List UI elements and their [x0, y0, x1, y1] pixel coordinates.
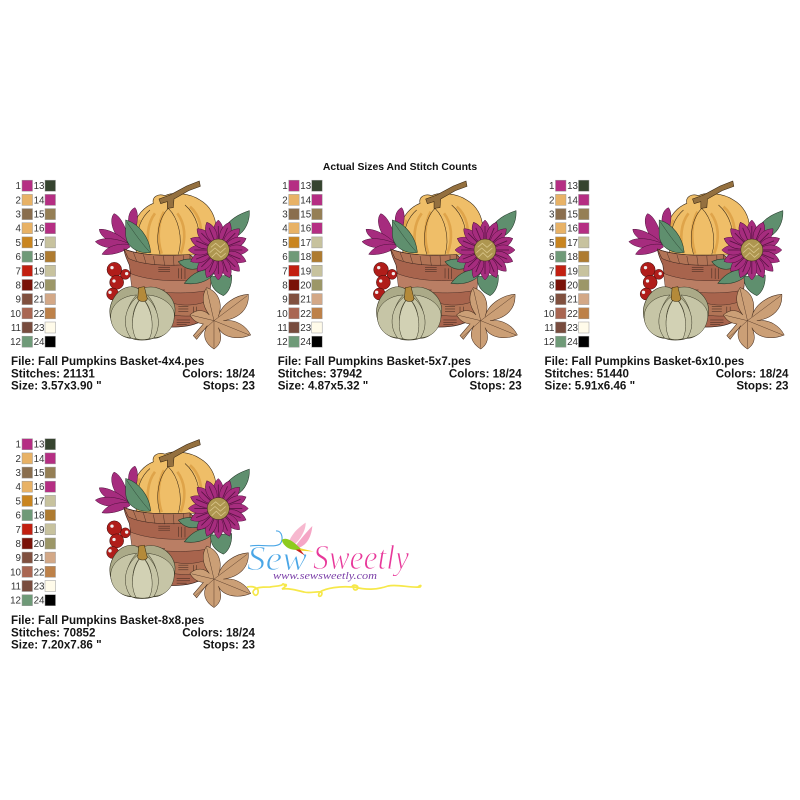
swatch numbers 4x4: 3: [16, 210, 22, 221]
swatch numbers 6x10: 22: [567, 309, 578, 320]
swatch numbers 5x7: 22: [300, 309, 311, 320]
swatch numbers 8x8: 17: [34, 496, 44, 507]
file info 6x10: [544, 355, 789, 393]
swatch numbers 5x7: 11: [278, 323, 288, 334]
file info 4x4: Stops: 23: [203, 380, 256, 393]
panel: 8x8 design: [10, 439, 256, 652]
swatch numbers 4x4: [10, 181, 45, 348]
swatch numbers 4x4: 1: [16, 181, 21, 192]
swatch numbers 5x7: 14: [300, 195, 312, 206]
swatch numbers 4x4: 5: [16, 238, 22, 249]
logo swash: [250, 531, 282, 546]
swatch numbers 5x7: 10: [277, 309, 288, 320]
swatch numbers 4x4: 10: [10, 309, 22, 320]
logo: Sew Sweetly: [247, 523, 421, 596]
swatch numbers 6x10: 23: [567, 323, 579, 334]
swatch numbers 8x8: 23: [34, 582, 45, 592]
swatch numbers 5x7: 12: [277, 337, 288, 348]
swatch numbers 6x10: 19: [567, 266, 578, 277]
swatch numbers 4x4: 22: [34, 309, 44, 320]
swatch numbers 5x7: 3: [282, 210, 288, 221]
swatch numbers 6x10: 2: [549, 195, 554, 206]
swatch numbers 8x8: 7: [16, 525, 21, 536]
file info 4x4: Colors: 18/24: [182, 367, 256, 380]
swatch numbers 6x10: 3: [549, 210, 555, 221]
swatch numbers 6x10: 21: [567, 295, 578, 306]
panel: 6x10 design: [544, 180, 789, 393]
swatch numbers 5x7: 23: [300, 323, 312, 334]
swatch numbers 8x8: 11: [11, 582, 21, 592]
swatch numbers 4x4: 19: [34, 266, 44, 277]
swatch numbers 5x7: 17: [300, 238, 311, 249]
swatch numbers 8x8: 14: [34, 454, 45, 465]
file info 6x10: Stops: 23: [736, 380, 789, 393]
file info 5x7: File: Fall Pumpkins Basket-5x7.pes: [278, 355, 471, 368]
swatch numbers 6x10: 1: [549, 181, 554, 192]
file info 5x7: Stops: 23: [470, 380, 522, 393]
swatch numbers 4x4: 2: [16, 195, 21, 206]
swatch numbers 8x8: 15: [34, 468, 45, 479]
swatch numbers 8x8: 12: [10, 596, 21, 607]
swatch numbers 8x8: 1: [16, 440, 21, 451]
file info 4x4: [11, 355, 256, 393]
swatch numbers 4x4: 18: [34, 252, 45, 263]
color swatches 4x4: [22, 180, 56, 347]
swatch numbers 8x8: 21: [34, 553, 44, 564]
swatch numbers 5x7: 5: [282, 238, 288, 249]
swatch numbers 8x8: 19: [34, 525, 44, 536]
swatch numbers 6x10: 4: [549, 224, 555, 235]
swatch numbers 4x4: 21: [34, 295, 44, 306]
swatch numbers 5x7: 19: [300, 266, 311, 277]
swatch numbers 4x4: 9: [16, 295, 21, 306]
swatch numbers 4x4: 15: [34, 210, 45, 221]
swatch numbers 4x4: 11: [11, 323, 21, 334]
swatch numbers 6x10: 12: [544, 337, 554, 348]
swatch numbers 5x7: 1: [282, 181, 288, 192]
file info 6x10: File: Fall Pumpkins Basket-6x10.pes: [544, 355, 744, 368]
file info 5x7: Colors: 18/24: [449, 367, 522, 380]
file info 4x4: Stitches: 21131: [11, 367, 95, 380]
embroidery artwork 8x8: [95, 439, 251, 607]
swatch numbers 5x7: 21: [300, 295, 311, 306]
swatch numbers 4x4: 17: [34, 238, 44, 249]
file info 8x8: [11, 614, 256, 652]
file info 6x10: Colors: 18/24: [716, 367, 789, 380]
swatch numbers 4x4: 4: [16, 224, 22, 235]
swatch numbers 6x10: 20: [567, 280, 579, 292]
embroidery artwork 4x4: [95, 181, 251, 349]
swatch numbers 5x7: 18: [300, 252, 312, 263]
swatch numbers 8x8: [10, 440, 45, 607]
swatch numbers 5x7: [277, 181, 312, 348]
panel: 4x4 design: [10, 180, 256, 393]
swatch numbers 6x10: 9: [549, 295, 554, 306]
swatch numbers 8x8: 16: [34, 482, 45, 493]
swatch numbers 4x4: 24: [34, 337, 45, 348]
swatch numbers 4x4: 12: [10, 337, 21, 348]
swatch numbers 8x8: 18: [34, 511, 45, 522]
file info 8x8: Stitches: 70852: [11, 626, 95, 639]
swatch numbers 6x10: 5: [549, 238, 555, 249]
file info 4x4: Size: 3.57x3.90 ": [11, 380, 102, 393]
swatch numbers 5x7: 2: [282, 195, 288, 206]
swatch numbers 8x8: 9: [16, 553, 21, 564]
swatch numbers 4x4: 14: [34, 195, 45, 206]
swatch numbers 8x8: 22: [34, 567, 44, 578]
swatch numbers 6x10: 6: [549, 252, 555, 263]
embroidery artwork 6x10: [629, 181, 784, 349]
swatch numbers 6x10: 13: [567, 181, 579, 192]
panel: 5x7 design: [277, 180, 522, 393]
logo url: www.sewsweetly.com: [273, 570, 377, 582]
swatch numbers 8x8: 4: [16, 482, 22, 493]
swatch numbers 8x8: 10: [10, 567, 22, 578]
swatch numbers 5x7: 6: [282, 252, 288, 263]
swatch numbers 4x4: 20: [34, 280, 45, 292]
swatch numbers 4x4: 16: [34, 224, 45, 235]
swatch numbers 8x8: 24: [34, 596, 45, 607]
swatch numbers 5x7: 9: [282, 295, 288, 306]
swatch numbers 8x8: 5: [16, 496, 22, 507]
logo name Sweetly: Sweetly: [313, 538, 409, 577]
swatch numbers 4x4: 6: [16, 252, 22, 263]
swatch numbers 6x10: 16: [567, 224, 579, 235]
file info 8x8: Size: 7.20x7.86 ": [11, 639, 102, 652]
logo yellow flourish: [247, 584, 421, 596]
file info 4x4: File: Fall Pumpkins Basket-4x4.pes: [11, 355, 204, 368]
title: Actual Sizes And Stitch Counts: [323, 162, 477, 173]
swatch numbers 5x7: 20: [300, 280, 312, 292]
swatch numbers 8x8: 3: [16, 468, 22, 479]
swatch numbers 6x10: 24: [567, 337, 579, 348]
color swatches 5x7: [289, 180, 322, 347]
swatch numbers 4x4: 13: [34, 181, 45, 192]
swatch numbers 6x10: 15: [567, 210, 579, 221]
file info 8x8: Colors: 18/24: [182, 626, 256, 639]
swatch numbers 5x7: 16: [300, 224, 312, 235]
swatch numbers 6x10: 7: [549, 266, 554, 277]
swatch numbers 8x8: 20: [34, 539, 45, 550]
swatch numbers 5x7: 15: [300, 210, 312, 221]
swatch numbers 6x10: 17: [567, 238, 578, 249]
file info 5x7: [278, 355, 522, 393]
file info 8x8: File: Fall Pumpkins Basket-8x8.pes: [11, 614, 204, 627]
swatch numbers 5x7: 7: [282, 266, 288, 277]
file info 6x10: Size: 5.91x6.46 ": [544, 380, 635, 393]
file info 6x10: Stitches: 51440: [544, 367, 629, 380]
swatch numbers 6x10: 11: [544, 323, 554, 334]
swatch numbers 6x10: 8: [549, 280, 555, 292]
swatch numbers 8x8: 13: [34, 440, 45, 451]
swatch numbers 8x8: 8: [16, 539, 22, 550]
swatch numbers 6x10: [544, 181, 579, 348]
swatch numbers 5x7: 8: [282, 280, 288, 292]
embroidery artwork 5x7: [362, 181, 517, 349]
swatch numbers 4x4: 8: [16, 280, 22, 292]
color swatches 8x8: [22, 439, 56, 606]
swatch numbers 5x7: 4: [282, 224, 288, 235]
color swatches 6x10: [556, 180, 589, 347]
file info 5x7: Size: 4.87x5.32 ": [278, 380, 368, 393]
swatch numbers 8x8: 2: [16, 454, 21, 465]
swatch numbers 6x10: 18: [567, 252, 579, 263]
swatch numbers 5x7: 13: [300, 181, 312, 192]
swatch numbers 5x7: 24: [300, 337, 312, 348]
swatch numbers 6x10: 10: [544, 309, 555, 320]
file info 5x7: Stitches: 37942: [278, 367, 362, 380]
swatch numbers 4x4: 7: [16, 266, 21, 277]
swatch numbers 8x8: 6: [16, 511, 22, 522]
swatch numbers 4x4: 23: [34, 323, 45, 334]
logo name Sew: Sew: [247, 539, 308, 578]
icon: hummingbird: [282, 523, 314, 555]
file info 8x8: Stops: 23: [203, 639, 256, 652]
swatch numbers 6x10: 14: [567, 195, 579, 206]
